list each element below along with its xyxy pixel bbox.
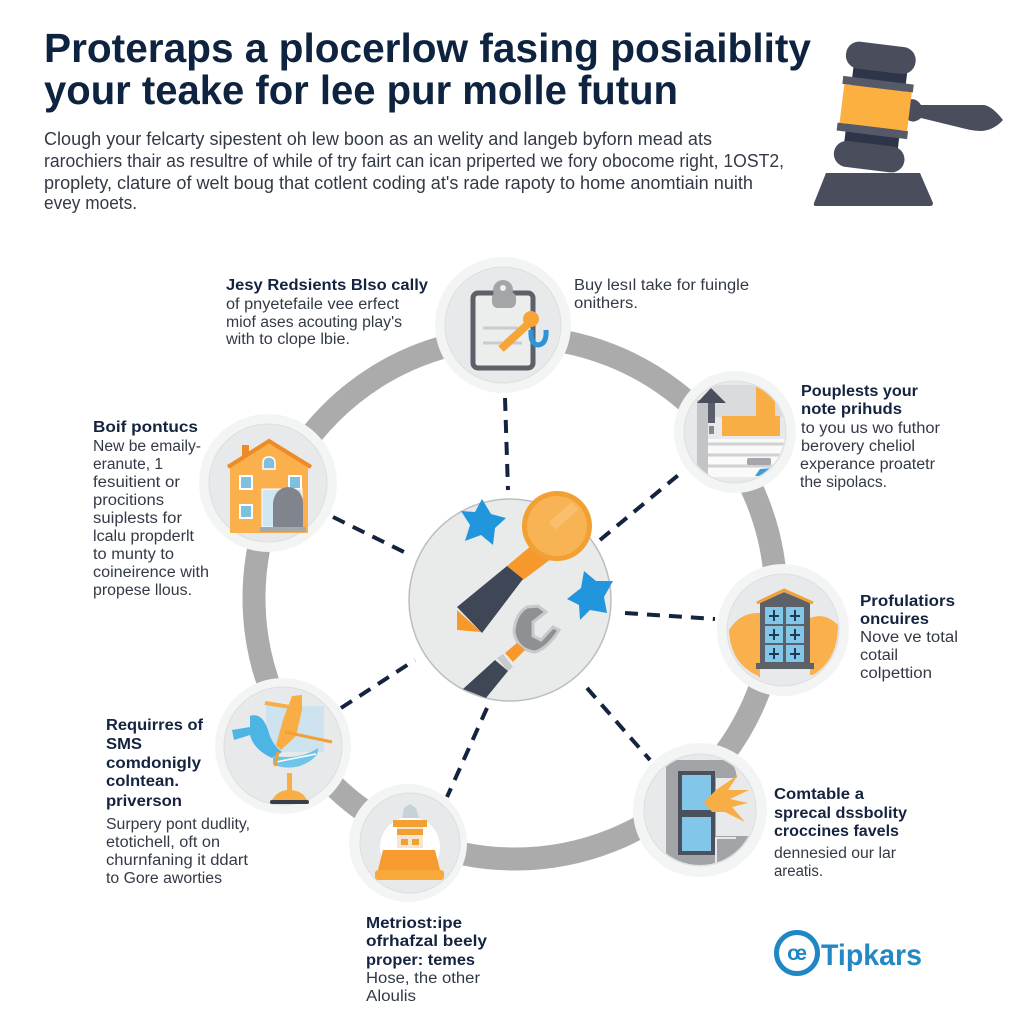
label: building: oncuires	[860, 611, 929, 628]
label: chair	[106, 717, 250, 887]
label: documents: berovery cheliol	[801, 438, 915, 455]
central icon: tools and stars	[409, 491, 613, 701]
label: chair: priverson	[106, 793, 182, 810]
label: house: propese llous.	[93, 582, 192, 599]
icon: document stack with arrow	[697, 385, 788, 480]
intro text block: Clough your felcarty sipestent oh lew boon as an welity and langeb byforn mead ats	[44, 129, 712, 149]
label: chair: Surpery pont dudlity,	[106, 816, 250, 833]
label: pedestal	[366, 915, 487, 1005]
logo: Tipkars	[821, 939, 922, 972]
logo	[776, 932, 922, 974]
label: house: lcalu propderlt	[93, 528, 195, 545]
label: house	[93, 419, 209, 599]
label: building: colpettion	[860, 665, 932, 682]
label: house: coineirence with	[93, 564, 209, 581]
intro text block: proplety, clature of welt boug that cotlent coding at's rade rapoty to home anomtiain nuith	[44, 173, 753, 193]
label: house: eranute, 1	[93, 456, 163, 473]
wrench shaft	[505, 643, 525, 662]
label: chair: churnfaning it ddart	[106, 852, 249, 869]
label: chair: SMS	[106, 736, 142, 753]
intro text block	[44, 129, 784, 213]
label: pedestal: proper: temes	[366, 952, 475, 969]
label: top right	[574, 277, 749, 312]
label: chair: comdonigly	[106, 755, 201, 772]
orange tip	[457, 610, 481, 632]
label: chair: colntean.	[106, 773, 179, 790]
node: clipboard	[435, 257, 571, 393]
label: top left: of pnyetefaile vee erfect	[226, 296, 400, 313]
star right	[567, 571, 613, 620]
label: top left: miof ases acouting play's	[226, 314, 402, 331]
logo: œ	[787, 942, 807, 965]
icon: building	[729, 590, 838, 678]
label: building: Nove ve total	[860, 629, 958, 646]
label: door: areatis.	[774, 863, 823, 880]
label: pedestal: Aloulis	[366, 988, 416, 1005]
wrench head	[514, 606, 559, 652]
outer ring	[254, 337, 776, 859]
icon: clipboard	[473, 280, 546, 368]
label: building	[860, 593, 958, 682]
node: door	[633, 743, 767, 877]
label: house: Boif pontucs	[93, 419, 198, 436]
title: Proteraps a plocerlow fasing posiaiblity	[44, 25, 811, 71]
node: building	[717, 564, 849, 696]
label: top right: Buy lesıl take for fuingle	[574, 277, 749, 294]
label: pedestal: ofrhafzal beely	[366, 933, 487, 950]
label: documents: experance proatetr	[800, 456, 935, 473]
dark grip	[457, 566, 523, 633]
label: door: sprecal dssbolity	[774, 805, 907, 822]
dashed connectors	[333, 398, 715, 797]
label: house: to munty to	[93, 546, 174, 563]
icon: gavel	[814, 40, 1003, 206]
label: door	[774, 786, 907, 880]
label: house: New be emaily-	[93, 438, 201, 455]
label: top left: Jesy Redsients Blso cally	[226, 277, 428, 294]
label: building: Profulatiors	[860, 593, 955, 610]
label: documents: the sipolacs.	[800, 474, 887, 491]
label: door: dennesied our lar	[774, 845, 896, 862]
medal	[522, 491, 592, 561]
icon: pedestal	[375, 804, 444, 880]
icon: house	[228, 441, 311, 533]
label: house: fesuitient or	[93, 474, 180, 491]
label: top left: with to clope lbie.	[225, 331, 350, 348]
label: house: procitions	[93, 492, 164, 509]
label: house: suiplests for	[93, 510, 182, 527]
label: chair: Requirres of	[106, 717, 204, 734]
label: top right: onithers.	[574, 295, 638, 312]
title: your teake for lee pur molle futun	[44, 67, 678, 113]
label: pedestal: Metriost:ipe	[366, 915, 462, 932]
label: documents: to you us wo futhor	[801, 420, 940, 437]
node: pedestal	[349, 784, 467, 902]
node: documents	[674, 371, 796, 493]
title	[44, 25, 811, 113]
star left	[461, 499, 506, 545]
node: chair	[215, 678, 351, 814]
icon: door with burst	[666, 760, 750, 865]
icon: swivel chair	[232, 695, 332, 804]
label: chair: etotichell, oft on	[106, 834, 220, 851]
label: building: cotail	[860, 647, 898, 664]
label: documents: note prihuds	[801, 401, 902, 418]
label: top left	[225, 277, 428, 348]
intro text block: evey moets.	[44, 193, 137, 213]
label: chair: to Gore aworties	[106, 870, 222, 887]
node: house	[199, 414, 337, 552]
magnifier handle	[507, 540, 555, 580]
label: documents	[800, 383, 940, 491]
label: pedestal: Hose, the other	[366, 970, 480, 987]
label: documents: Pouplests your	[801, 383, 918, 400]
wrench handle	[463, 660, 508, 698]
label: door: Comtable a	[774, 786, 864, 803]
label: door: croccines favels	[774, 823, 899, 840]
intro text block: rarochiers thair as resultre of while of try fairt can ican priperted we fory obocome right, 1OST2,	[44, 151, 784, 171]
